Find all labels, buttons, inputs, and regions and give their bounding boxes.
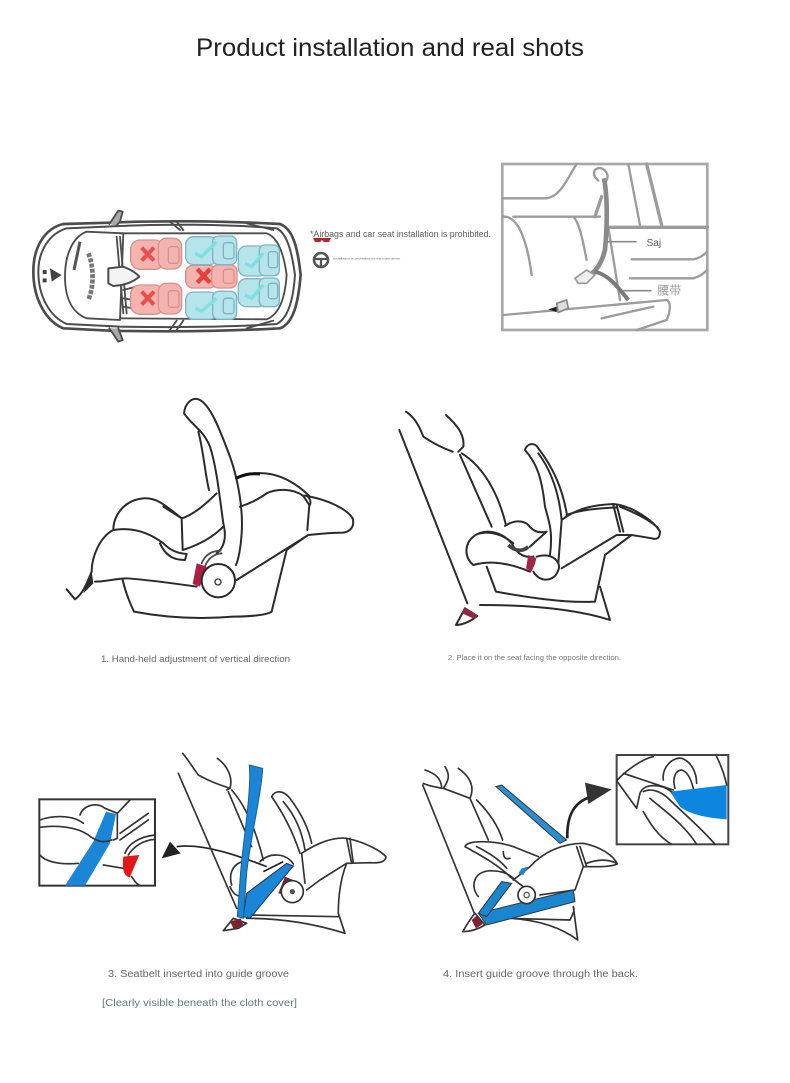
seat: middle right, allowed	[186, 291, 237, 319]
vehicle seat outline	[399, 412, 610, 620]
vehicle seat outline	[178, 753, 345, 933]
label: lap belt: 腰带	[657, 284, 681, 298]
adjustment hinge	[193, 551, 235, 597]
carrier outline	[465, 842, 617, 897]
vehicle seat outline	[423, 767, 578, 940]
buckle	[463, 913, 485, 932]
car body outline	[33, 211, 301, 342]
lap belt anchor	[548, 300, 568, 312]
shoulder belt	[496, 785, 567, 843]
panel frame	[502, 164, 707, 330]
seat outline	[67, 399, 353, 618]
detail inset	[617, 755, 728, 844]
seat: middle left, allowed	[186, 236, 237, 265]
detail inset	[39, 799, 155, 886]
arrow	[567, 783, 612, 838]
arrow	[162, 842, 267, 867]
seatbelt location diagram	[502, 164, 707, 330]
icon: steering wheel	[314, 253, 328, 267]
driver warning small text: Installation is prohibited for the main driver.	[333, 256, 401, 260]
step 2 caption: 2. Place it on the seat facing the opposite direction.	[448, 655, 621, 662]
seat: front left, no installation	[131, 238, 182, 269]
buckle	[223, 918, 247, 931]
hinge	[278, 877, 303, 903]
hinge	[526, 555, 559, 580]
leader lines	[605, 242, 652, 291]
label: shoulder belt: Saj	[647, 238, 661, 249]
seatbelt	[237, 765, 293, 918]
hinge	[518, 886, 535, 904]
front console	[108, 267, 139, 286]
shoulder belt	[575, 168, 628, 300]
main driver warning	[314, 253, 401, 267]
icon: airbag	[313, 238, 331, 242]
car top view diagram	[33, 211, 301, 342]
seat: rear right, allowed	[238, 278, 279, 307]
seat: rear left, allowed	[238, 245, 279, 276]
airbag warning text: *Airbags and car seat installation is prohibited.	[310, 229, 491, 239]
carrier outline	[466, 444, 660, 602]
cloth cover note: [Clearly visible beneath the cloth cover]	[102, 998, 297, 1009]
step 1 illustration	[67, 399, 353, 618]
step 2 illustration	[399, 412, 660, 625]
step 4 caption: 4. Insert guide groove through the back.	[443, 969, 638, 980]
seat: middle centre, no installation	[186, 265, 237, 288]
step 3 illustration	[39, 753, 386, 933]
airbag warning note	[310, 229, 491, 242]
belt buckle	[456, 607, 477, 625]
car interior lines	[502, 164, 707, 330]
step 4 illustration	[423, 755, 728, 940]
seatbelt	[478, 867, 575, 925]
carrier outline	[230, 792, 386, 913]
seat: front right, no installation	[131, 283, 182, 314]
title: Product installation and real shots	[196, 34, 584, 62]
step 1 caption: 1. Hand-held adjustment of vertical direction	[101, 654, 290, 665]
step 3 caption: 3. Seatbelt inserted into guide groove	[108, 969, 289, 980]
